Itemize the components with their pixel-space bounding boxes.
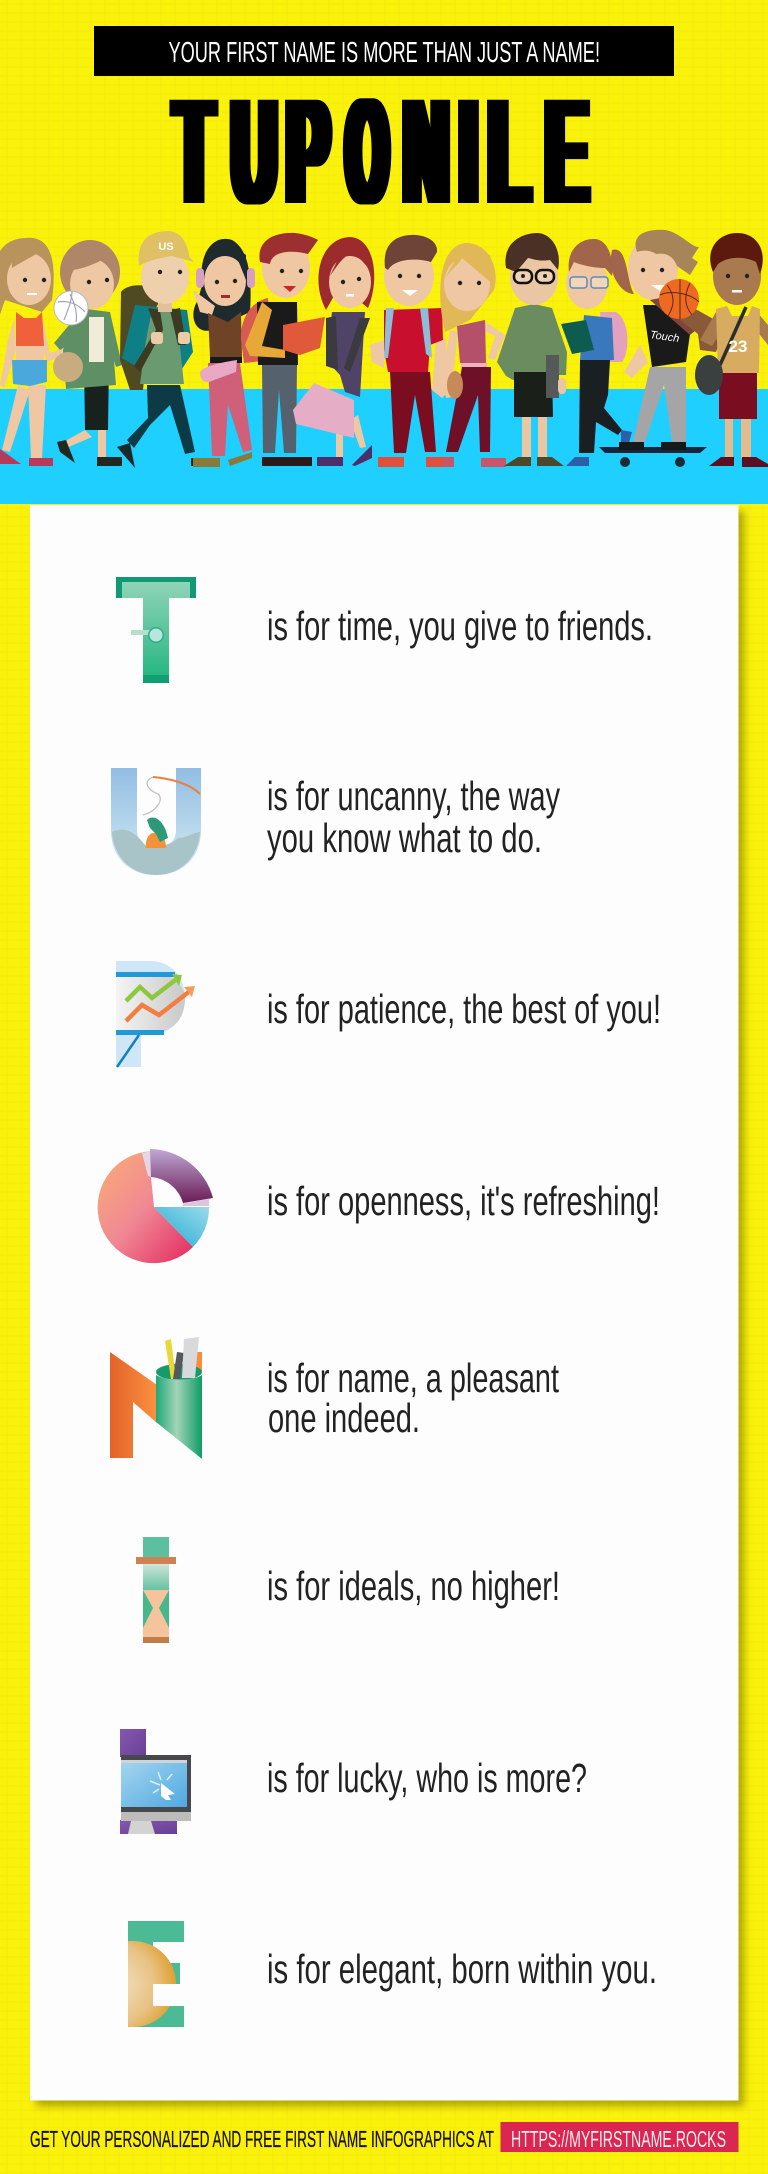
person 6 xyxy=(293,237,374,466)
person 11: Touch xyxy=(649,329,680,345)
icon: E moon xyxy=(128,1921,184,2027)
icon: N pencil cup xyxy=(110,1337,202,1459)
title: I xyxy=(460,68,477,236)
title: O xyxy=(347,67,388,235)
person 10 xyxy=(561,239,634,466)
header bar xyxy=(94,26,674,76)
icon: I hourglass xyxy=(136,1537,176,1643)
icon: T door xyxy=(116,577,196,683)
text: I: is for ideals, no higher! xyxy=(267,1563,560,1609)
title: T xyxy=(175,69,213,236)
text: U line 2: you know what to do. xyxy=(267,815,542,861)
icon: L monitor xyxy=(120,1729,191,1834)
row E xyxy=(90,1921,657,2027)
person 3 xyxy=(117,231,220,468)
person 7 xyxy=(370,235,454,467)
person 3: US xyxy=(158,241,174,253)
text: N line 1: is for name, a pleasant xyxy=(267,1355,559,1401)
row U xyxy=(111,768,560,875)
title: N xyxy=(404,68,448,236)
title: E xyxy=(546,69,588,236)
icon: U fishing xyxy=(111,768,201,875)
person 2 xyxy=(53,240,122,466)
person 4 xyxy=(193,239,255,467)
icon: P chart xyxy=(116,961,195,1067)
person 9 xyxy=(497,233,567,466)
person 8 xyxy=(440,243,506,467)
person 11 xyxy=(599,230,726,467)
footer xyxy=(30,2122,738,2152)
people group illustration xyxy=(0,230,768,468)
text: L: is for lucky, who is more? xyxy=(267,1755,587,1801)
person 5 xyxy=(241,233,325,466)
text: U xyxy=(267,773,560,861)
title xyxy=(175,67,588,236)
text: N line 2: one indeed. xyxy=(268,1395,420,1441)
person 1 xyxy=(0,238,74,466)
title: L xyxy=(488,68,530,235)
text: N xyxy=(267,1355,559,1441)
title: U xyxy=(232,68,276,236)
blue floor band xyxy=(0,389,768,504)
row I xyxy=(136,1537,560,1643)
person 12 xyxy=(695,233,768,467)
person 12: 23 xyxy=(729,337,747,356)
white card panel xyxy=(30,505,738,2100)
row L xyxy=(120,1729,587,1834)
row T xyxy=(116,577,653,683)
row N xyxy=(110,1337,559,1459)
row O xyxy=(98,1149,660,1263)
icon: O pie chart xyxy=(98,1149,213,1263)
row P xyxy=(116,961,661,1067)
title: P xyxy=(287,69,329,236)
text: U line 1: is for uncanny, the way xyxy=(267,773,560,819)
